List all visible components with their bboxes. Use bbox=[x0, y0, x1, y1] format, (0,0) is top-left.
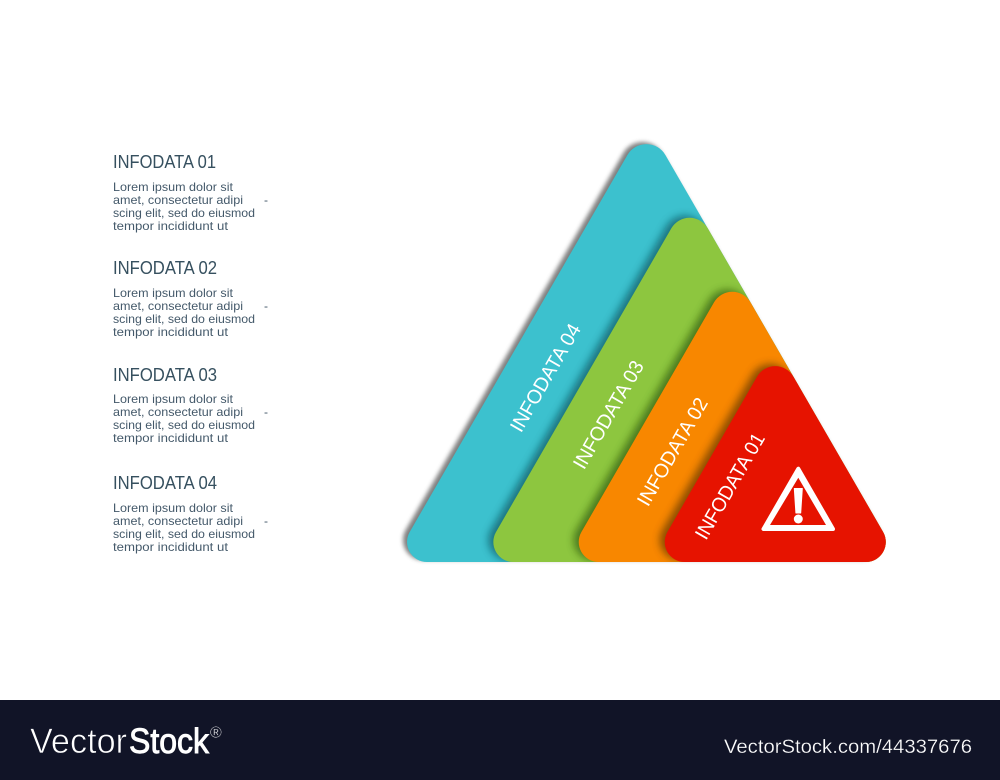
legend item: infodata 01: INFODATA 01 bbox=[113, 152, 216, 172]
legend item: infodata 03: - bbox=[264, 405, 268, 419]
legend item: infodata 04: INFODATA 04 bbox=[113, 473, 217, 493]
footer logo: Vector bbox=[30, 722, 127, 761]
legend item: infodata 01: - bbox=[264, 193, 268, 207]
legend item: infodata 01: tempor incididunt ut bbox=[113, 219, 229, 233]
orange layer label: INFODATA 02 bbox=[633, 394, 713, 510]
legend item: infodata 04: - bbox=[264, 514, 268, 528]
legend list bbox=[113, 152, 268, 554]
legend item: infodata 02: amet, consectetur adipi bbox=[113, 299, 243, 313]
legend item: infodata 03: scing elit, sed do eiusmod bbox=[113, 418, 255, 432]
blue layer bbox=[407, 144, 886, 562]
orange layer shadow bbox=[570, 286, 749, 562]
registered mark: ® bbox=[210, 724, 222, 742]
legend item: infodata 04: scing elit, sed do eiusmod bbox=[113, 527, 255, 541]
legend item: infodata 04: Lorem ipsum dolor sit bbox=[113, 501, 234, 515]
legend item: infodata 03: tempor incididunt ut bbox=[113, 431, 229, 445]
legend item: infodata 02: - bbox=[264, 299, 268, 313]
red layer shadow bbox=[654, 359, 792, 562]
footer image id: VectorStock.com/44337676 bbox=[724, 737, 972, 758]
legend item: infodata 03: INFODATA 03 bbox=[113, 365, 217, 385]
footer bar bbox=[0, 700, 1000, 780]
legend item: infodata 02 bbox=[113, 258, 268, 339]
red layer label: INFODATA 01 bbox=[691, 429, 770, 544]
legend item: infodata 03: amet, consectetur adipi bbox=[113, 405, 243, 419]
layered triangle chart bbox=[403, 142, 886, 562]
footer logo bbox=[30, 722, 209, 761]
blue layer shadow bbox=[403, 142, 882, 560]
legend item: infodata 02: tempor incididunt ut bbox=[113, 325, 229, 339]
legend item: infodata 01: Lorem ipsum dolor sit bbox=[113, 180, 234, 194]
legend item: infodata 04: tempor incididunt ut bbox=[113, 540, 229, 554]
legend item: infodata 03 bbox=[113, 365, 268, 445]
legend item: infodata 02: INFODATA 02 bbox=[113, 258, 217, 278]
legend item: infodata 02: Lorem ipsum dolor sit bbox=[113, 286, 234, 300]
legend item: infodata 03: Lorem ipsum dolor sit bbox=[113, 392, 234, 406]
icon: warning triangle bbox=[764, 469, 833, 529]
red layer bbox=[665, 366, 886, 562]
legend item: infodata 04: amet, consectetur adipi bbox=[113, 514, 243, 528]
legend item: infodata 01 bbox=[113, 152, 268, 233]
orange layer bbox=[579, 292, 886, 562]
blue layer label: INFODATA 04 bbox=[506, 320, 586, 436]
legend item: infodata 01: amet, consectetur adipi bbox=[113, 193, 243, 207]
green layer bbox=[493, 218, 886, 562]
green layer shadow bbox=[484, 211, 706, 562]
legend item: infodata 02: scing elit, sed do eiusmod bbox=[113, 312, 255, 326]
footer logo: Stock bbox=[129, 722, 209, 761]
green layer label: INFODATA 03 bbox=[569, 357, 649, 473]
legend item: infodata 04 bbox=[113, 473, 268, 554]
legend item: infodata 01: scing elit, sed do eiusmod bbox=[113, 206, 255, 220]
